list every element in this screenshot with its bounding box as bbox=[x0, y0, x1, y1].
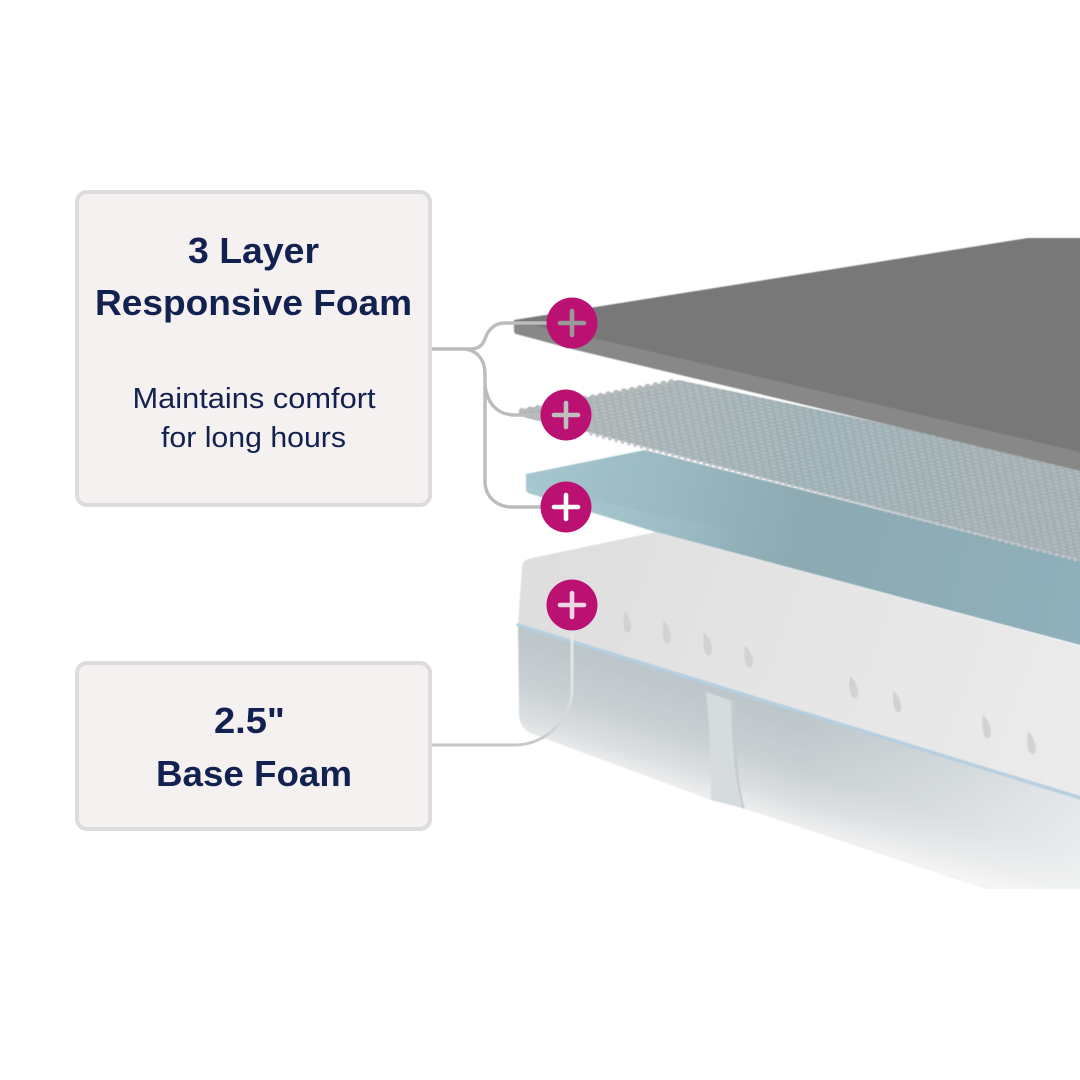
cover handle bbox=[706, 692, 745, 809]
mattress layers infographic bbox=[75, 190, 1080, 889]
gray front edge bbox=[514, 321, 1080, 478]
lower cover bbox=[518, 626, 1080, 889]
knit textured foam layer bbox=[518, 380, 1080, 569]
heading: 2.5 inch base foam: 2.5" bbox=[214, 700, 285, 741]
panel: base foam bbox=[77, 663, 430, 829]
blue front edge bbox=[526, 486, 740, 552]
knit base bbox=[518, 380, 1080, 569]
white foam block bbox=[518, 532, 1080, 807]
heading: 3 layer responsive foam bbox=[95, 230, 412, 323]
gray top face bbox=[514, 238, 1080, 460]
heading: 3 layer responsive foam: 3 Layer bbox=[188, 230, 319, 271]
base foam mattress bbox=[518, 532, 1080, 930]
description text: Maintains comfort bbox=[132, 383, 376, 415]
foam dimples bbox=[624, 610, 1036, 754]
blue top face bbox=[526, 450, 1080, 653]
blue piping bbox=[518, 625, 1080, 807]
knit scalloped top edge bbox=[522, 382, 672, 411]
knit dots bbox=[518, 380, 1080, 569]
knit scalloped bottom edge bbox=[591, 434, 1080, 566]
connector line from base foam box bbox=[432, 630, 572, 745]
marker: knit layer bbox=[540, 390, 592, 440]
gray top foam layer bbox=[514, 238, 1080, 478]
description text bbox=[132, 383, 376, 454]
heading: 2.5 inch base foam bbox=[156, 700, 352, 794]
heading: 3 layer responsive foam: Responsive Foam bbox=[95, 282, 412, 323]
marker: top layer bbox=[546, 298, 598, 348]
connector lines from responsive foam box bbox=[432, 323, 548, 507]
description text: for long hours bbox=[161, 422, 346, 454]
marker: blue layer bbox=[540, 482, 592, 532]
blue comfort foam layer bbox=[526, 450, 1080, 653]
heading: 2.5 inch base foam: Base Foam bbox=[156, 753, 352, 794]
cover fade bbox=[855, 734, 1080, 889]
panel: 3 layer responsive foam bbox=[77, 192, 430, 505]
marker: base foam bbox=[546, 580, 598, 630]
